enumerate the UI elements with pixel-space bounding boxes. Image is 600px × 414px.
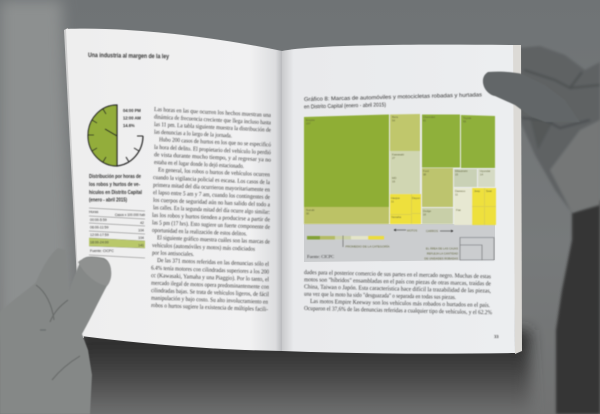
right page xyxy=(282,45,515,354)
table: hours: 06:00-11:59 xyxy=(90,226,108,230)
right page body text: motos son "híbridos" ensambladas en el país con piezas de otras marcas, traídas de xyxy=(304,277,491,287)
treemap: cars xyxy=(422,114,496,225)
treemap: motos: Yamaha xyxy=(391,215,402,219)
left page body text: la hora del delito. El propietario del vehículo lo perdió xyxy=(154,145,271,156)
hand: left with thumb over page xyxy=(0,248,111,414)
treemap: cars: Mitsubishi xyxy=(455,169,468,173)
treemap: cars: 14 xyxy=(480,172,484,176)
table: hours: Fuente: CICPC xyxy=(90,249,114,253)
left page body text: las 5 pm (17 hrs). Esto sugiere un fuerte componente de xyxy=(152,219,270,231)
left page body text: oportunidad en la realización de estos delitos. xyxy=(152,228,247,238)
table: hours: 12:00-17:59 xyxy=(90,233,109,237)
treemap: motos: Empire xyxy=(306,118,315,122)
right page body text: dades para el posterior comercio de sus partes en el mercado negro. Muchas de estas xyxy=(304,270,492,280)
left page body text: mercado ilegal de motos opera predominantemente con xyxy=(151,281,269,291)
page number: 33 xyxy=(494,334,499,339)
treemap: motos: Haojue xyxy=(391,196,400,200)
treemap: cars: Dodge xyxy=(423,209,432,213)
chart title: en Distrito Capital (enero - abril 2015) xyxy=(304,102,386,110)
left page body text: cc (Kawasaki, Yamaha y una Piaggio). Por lo tanto, el xyxy=(151,272,269,283)
right page body text: Ocuparon el 37,6% de las denuncias referidas a cualquier tipo de vehículos, y el 62.2% xyxy=(304,305,492,316)
right page body text: una vez que la moto ha sido "desguazada" o separada en todas sus piezas. xyxy=(304,292,456,301)
legend band xyxy=(304,224,495,262)
left page body text: robos o hurtos sugiere la existencia de múltiples facili- xyxy=(151,302,268,313)
left page edge stack xyxy=(64,28,84,338)
hand: right, behind the book xyxy=(515,46,600,213)
treemap: cars: 16 xyxy=(423,212,427,216)
treemap: cars: 38 xyxy=(423,172,427,176)
treemap: cars: Toyota xyxy=(463,116,472,120)
table heading: Distribución por horas de xyxy=(89,174,141,180)
treemap: cars: 11 xyxy=(455,192,458,196)
table heading xyxy=(89,174,142,204)
left page body text: de vista durante mucho tiempo, y al regresar ya no xyxy=(154,152,271,164)
table: hours: Horas xyxy=(89,210,99,214)
table: hours: 00:00-5:59 xyxy=(90,218,107,222)
treemap: motos: Dayun xyxy=(412,196,421,200)
clock labels: 04:00 PM xyxy=(123,108,141,113)
treemap: motos: Bera xyxy=(392,115,398,119)
running head: Una industria al margen de la ley xyxy=(88,52,170,60)
left page body text: las calles. En la segunda mitad del día ocurre algo similar: xyxy=(153,205,270,216)
treemap: motos: Kawasaki xyxy=(392,152,404,156)
treemap: motos: 157 xyxy=(306,122,311,126)
treemap: motos: Suzuki xyxy=(306,208,315,212)
clock labels: 12:00 AM xyxy=(123,116,141,120)
treemap: motos: 19 xyxy=(392,180,396,184)
right page body text: Las motos Empire Keeway son los vehículos más robados o hurtados en el país. xyxy=(310,299,490,309)
treemap: cars: 61 xyxy=(423,118,427,122)
left page body text: las denuncias a lo largo de la jornada. xyxy=(154,130,232,139)
treemap: cars: 55 xyxy=(463,120,467,124)
thumb: right hand over page xyxy=(483,72,580,122)
legend: colour scale xyxy=(307,236,389,248)
table heading: los robos y hurtos de ve- xyxy=(89,182,140,188)
legend: motos and carros arrows: CARROS xyxy=(426,229,438,233)
source: Fuente: CICPC xyxy=(307,254,334,259)
treemap: cars: Chevrolet xyxy=(423,115,435,119)
icon: clock chart xyxy=(88,105,143,166)
legend: area note: EL ÁREA DE LAS CAJAS xyxy=(426,246,458,250)
table heading: (enero - abril 2015) xyxy=(89,198,127,204)
treemap: motos: MD xyxy=(392,176,396,180)
treemap: motos: 27 xyxy=(392,156,396,160)
table: hours: Casos x 100.000 hab xyxy=(115,213,145,217)
left page body text: cilindradas bajas. Se trata de vehículos ligeros, de fácil xyxy=(151,287,269,298)
table: hours: 104 xyxy=(138,228,144,232)
treemap: cars: 15 xyxy=(455,172,459,176)
right page body text: China, Taiwan o Japón. Esta característica hace difícil la trazabilidad de las piezas, xyxy=(304,283,492,295)
right page edge stack xyxy=(512,45,522,354)
left page body text: primera mitad del día ocurrieron mayoritariamente en xyxy=(153,183,270,193)
table: hours xyxy=(89,208,145,258)
treemap chart xyxy=(304,114,496,262)
table: hours: 42 xyxy=(140,221,144,225)
legend: motos and carros arrows xyxy=(394,228,453,233)
left page body text: dinámica de frecuencia creciente que llega incluso hasta xyxy=(154,114,271,126)
legend: area note: REFLEJA LA CANTIDAD xyxy=(427,252,458,256)
left page body text: Las horas en las que ocurren los hechos muestran una xyxy=(154,107,271,119)
treemap: motos: 30 xyxy=(306,212,310,216)
right page body text xyxy=(304,270,492,316)
left page body text: El siguiente gráfico muestra cuáles son las marcas de xyxy=(157,234,270,246)
left page body text: En general, los robos o hurtos de vehículos ocurren xyxy=(158,168,270,178)
treemap: cars: Seat xyxy=(486,189,492,193)
chart title xyxy=(304,92,482,110)
left page body text: el lapso entre 5 am y 7 am, cuando los contingentes de xyxy=(153,190,270,201)
left page body text: las los robos y hurtos tienden a producirse a partir de xyxy=(152,213,270,223)
left page body text: cuando la vigilancia policial es escasa. Los casos de la xyxy=(153,175,270,186)
left page body text: las 11 pm. La tabla siguiente muestra la distribución de xyxy=(154,122,271,134)
chart title: Gráfico 8: Marcas de automóviles y motocicletas robadas y hurtadas xyxy=(304,92,482,103)
treemap: cars: Fiat xyxy=(456,208,461,212)
treemap: cars: Daewoo xyxy=(455,189,466,193)
clock labels xyxy=(123,108,141,128)
table: hours: 141 xyxy=(138,244,144,248)
left page body text: manipulación y bajo costo. Su alto involucramiento en xyxy=(151,296,268,306)
left page body text: estaba en el lugar donde lo dejó estacionado. xyxy=(154,160,244,170)
left page body text: Hubo 200 casos de hurtos en los que no se especificó xyxy=(159,136,271,148)
legend: area note xyxy=(424,238,494,260)
treemap: cars: Ford xyxy=(423,169,429,173)
left page body text xyxy=(151,107,271,313)
legend: area note: DE UNIDADES ROBADAS xyxy=(424,256,458,260)
left page body text: De las 371 motos referidas en las denuncias sólo el xyxy=(157,257,269,268)
left page body text: por los antisociales. xyxy=(152,251,195,258)
left page body text: los cuerpos de seguridad aún no han salido del todo a xyxy=(153,198,270,208)
table: hours: 18:00-24:00 xyxy=(90,240,109,244)
table heading: hículos en Distrito Capital xyxy=(89,190,142,196)
left page body text: vehículos (automóviles y motos) más codiciados xyxy=(152,242,256,253)
legend: motos and carros arrows: MOTOS xyxy=(407,228,417,232)
left page xyxy=(66,29,282,351)
treemap: motos xyxy=(304,114,421,224)
treemap: cars: Jeep xyxy=(474,189,481,193)
treemap: motos: 54 xyxy=(392,118,396,122)
sleeve at right xyxy=(556,200,600,414)
legend: colour scale: PROMEDIO DE LA CATEGORÍA xyxy=(346,244,389,248)
treemap: motos: 11 xyxy=(391,200,394,204)
left page body text: 6.4% tenía motores con cilindradas superiores a los 200 xyxy=(151,266,269,276)
treemap: cars: Hyundai xyxy=(480,169,491,173)
clock labels: 14.6% xyxy=(123,123,135,128)
table: hours: 104 xyxy=(138,236,144,240)
